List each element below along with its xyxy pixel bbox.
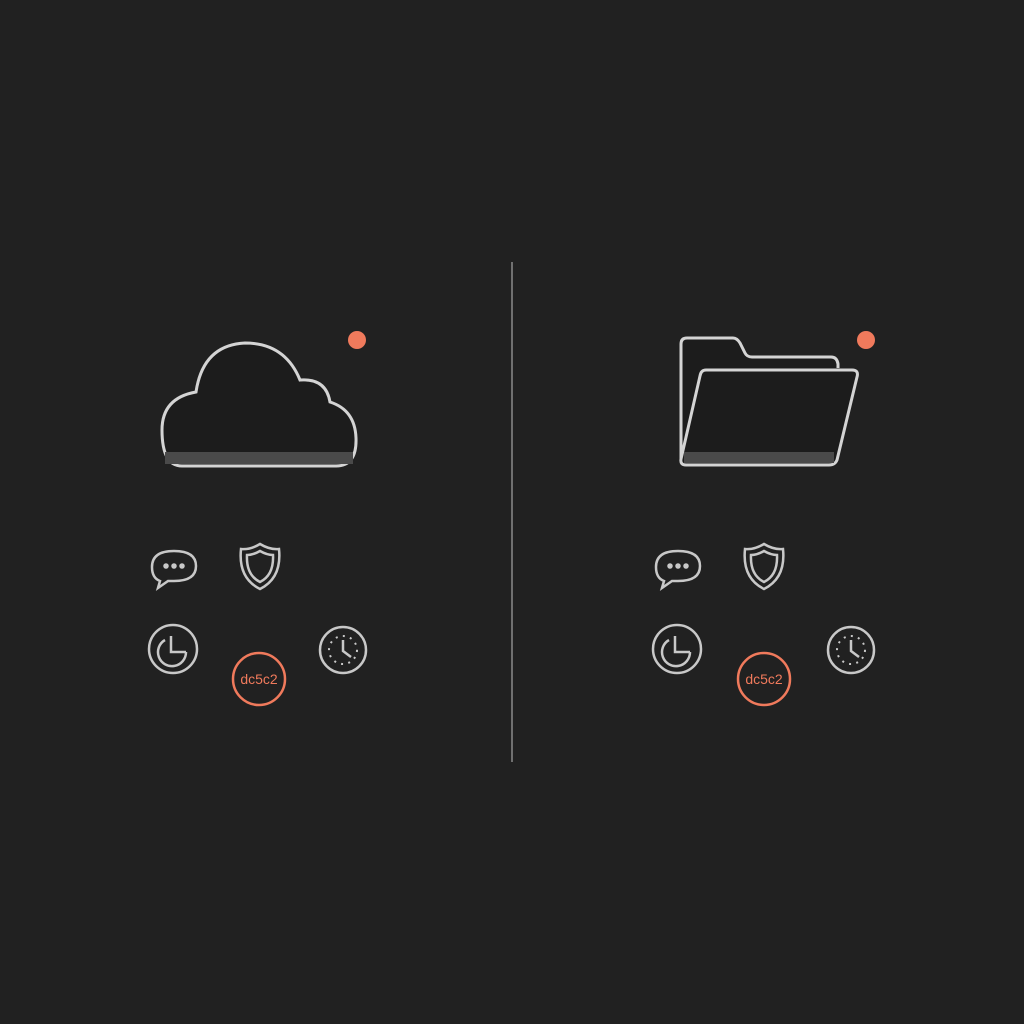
badge: dc5c2: dc5c2 <box>240 671 278 687</box>
badge: dc5c2: dc5c2 <box>745 671 783 687</box>
icon: clock dial <box>828 627 874 673</box>
panel: cloud <box>149 331 366 705</box>
icon: folder <box>681 338 857 465</box>
divider <box>511 262 513 762</box>
panel: folder <box>653 331 875 705</box>
badge: dc5c2 <box>738 653 790 705</box>
icon: clock dial <box>320 627 366 673</box>
status dot <box>857 331 875 349</box>
icon: shield <box>745 544 783 589</box>
icon: chat <box>656 551 700 588</box>
icon: cloud <box>162 343 356 466</box>
icon: clock simple <box>149 625 197 673</box>
icon: chat <box>152 551 196 588</box>
badge: dc5c2 <box>233 653 285 705</box>
icon: clock simple <box>653 625 701 673</box>
status dot <box>348 331 366 349</box>
icon: shield <box>241 544 279 589</box>
